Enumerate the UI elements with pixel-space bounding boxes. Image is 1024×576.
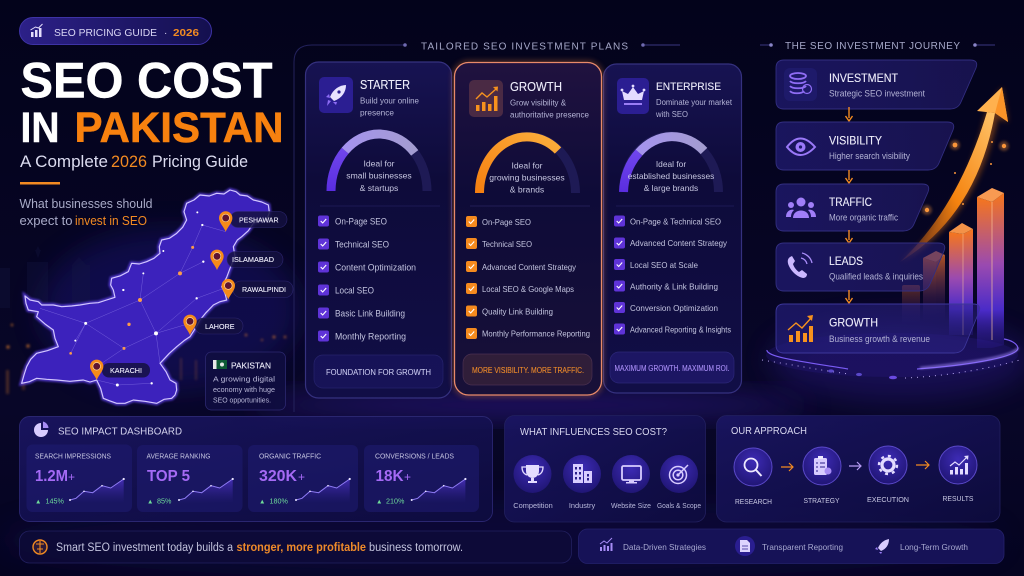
- arrow: [781, 463, 793, 471]
- metric: conversions and leads: 18K: [376, 468, 404, 485]
- feature list: Local SEO: [335, 286, 374, 296]
- step: results: [939, 446, 977, 503]
- plans section heading: [294, 42, 680, 412]
- icon: growth chart: [788, 315, 813, 342]
- growth arrow: [900, 87, 1008, 262]
- feature list: [318, 206, 440, 342]
- metric: average ranking: AVERAGE RANKING: [146, 452, 211, 460]
- gauge text: & brands: [510, 184, 544, 194]
- panel: Enterprise plan: [604, 64, 742, 393]
- step text: Strategic SEO investment: [829, 88, 926, 98]
- arrow: [846, 290, 852, 303]
- gauge text: Ideal for: [656, 159, 686, 169]
- icon: eye: [787, 138, 815, 155]
- step: research: RESEARCH: [735, 497, 772, 506]
- icon: target coin: [33, 540, 47, 554]
- benefit text: Data-Driven Strategies: [623, 542, 706, 552]
- step text: Qualified leads & inquiries: [829, 272, 924, 282]
- feature list: Advanced Content Strategy: [482, 262, 577, 272]
- intro text: expect to: [20, 213, 72, 228]
- factor: website size: Website Size: [611, 501, 651, 510]
- feature list: Authority & Link Building: [630, 282, 718, 292]
- step: execution: [867, 446, 909, 504]
- plan tagline: with SEO: [655, 109, 688, 119]
- journey step: Visibility: [776, 122, 954, 170]
- metric: organic traffic: 180%: [270, 496, 288, 506]
- title: [20, 52, 284, 152]
- plan name: GROWTH: [510, 79, 562, 94]
- gauge text: established businesses: [628, 171, 714, 181]
- step title: LEADS: [829, 254, 863, 268]
- journey section heading: THE SEO INVESTMENT JOURNEY: [785, 41, 960, 52]
- plan tagline: [360, 96, 419, 118]
- gauge text: & large brands: [644, 183, 698, 193]
- step title: VISIBILITY: [829, 134, 882, 148]
- metric: search impressions: 145%: [46, 496, 64, 506]
- icon: people: [786, 198, 816, 218]
- plan tagline: Dominate your market: [656, 97, 733, 107]
- metric: average ranking: [137, 445, 242, 512]
- feature list: Local SEO & Google Maps: [482, 284, 574, 294]
- metric: average ranking: TOP 5: [147, 468, 190, 485]
- metric: average ranking: ▲: [147, 498, 153, 506]
- gauge text: [346, 158, 412, 193]
- plan footer: MORE VISIBILITY. MORE TRAFFIC.: [472, 366, 584, 375]
- step title: GROWTH: [829, 316, 878, 330]
- feature list: Monthly Reporting: [335, 332, 406, 342]
- pin and label: Rawalpindi: RAWALPINDI: [242, 285, 286, 294]
- gauge: [331, 134, 427, 191]
- step: strategy: STRATEGY: [804, 496, 840, 505]
- panel: what influences SEO cost: [504, 416, 706, 522]
- feature list: Content Optimization: [335, 262, 416, 272]
- pin and label: Karachi: KARACHI: [110, 366, 142, 375]
- step: results: RESULTS: [942, 494, 974, 503]
- factor: competition: [513, 455, 553, 510]
- step text: Business growth & revenue: [829, 334, 930, 344]
- factor: industry: Industry: [569, 501, 595, 510]
- plan footer: [610, 352, 734, 383]
- feature list: Conversion Optimization: [630, 303, 718, 313]
- panel: Starter plan: [306, 62, 452, 398]
- plan tagline: [510, 98, 589, 120]
- journey step: Traffic: [776, 184, 929, 231]
- icon: rocket: [875, 539, 889, 554]
- intro text: invest in SEO: [75, 213, 147, 228]
- metric: conversions and leads: ▲: [376, 498, 382, 506]
- metric: conversions and leads: [364, 445, 479, 512]
- Pakistan info box: [206, 352, 286, 410]
- pin and label: Lahore: [183, 315, 243, 335]
- title: SEO COST: [20, 52, 272, 108]
- gauge: [624, 136, 718, 192]
- box text: [213, 376, 276, 404]
- plan tagline: authoritative presence: [510, 110, 589, 120]
- banner: tagline: [20, 531, 572, 563]
- gauge text: [628, 159, 714, 193]
- tagline text: stronger, more profitable: [236, 542, 366, 554]
- bar 1: [923, 251, 945, 322]
- feature list: On-Page SEO: [335, 216, 387, 226]
- factor: website size: [611, 455, 651, 510]
- factor: goals and scope: Goals & Scope: [657, 501, 701, 510]
- metric: organic traffic: 320K: [259, 468, 297, 485]
- step: strategy: [803, 447, 841, 505]
- feature list: Advanced Reporting & Insights: [630, 324, 731, 334]
- benefit text: Long-Term Growth: [900, 542, 968, 552]
- journey step: Leads: [776, 243, 945, 291]
- metric: search impressions: ▲: [35, 498, 41, 506]
- gauge text: & startups: [360, 183, 398, 193]
- step title: TRAFFIC: [829, 195, 872, 209]
- feature list: On-Page SEO: [482, 217, 531, 227]
- panel title: WHAT INFLUENCES SEO COST?: [520, 426, 667, 438]
- icon: data chart: [600, 538, 612, 551]
- arrow: [846, 107, 852, 121]
- icon: phone: [788, 253, 812, 278]
- arrow: [916, 461, 929, 469]
- plan name: STARTER: [360, 77, 410, 92]
- icon: bar chart badge: [30, 24, 42, 37]
- step title: INVESTMENT: [829, 71, 899, 85]
- network lines: [40, 225, 228, 385]
- step text: More organic traffic: [829, 212, 899, 222]
- gauge text: [489, 160, 565, 194]
- icon: Pakistan flag: [213, 360, 227, 369]
- intro text: What businesses should: [20, 196, 152, 211]
- panel: Growth plan: [454, 62, 602, 395]
- feature list: Monthly Performance Reporting: [482, 328, 590, 338]
- bar 3: [977, 188, 1004, 348]
- benefit text: Transparent Reporting: [762, 542, 843, 552]
- metric: organic traffic: +: [298, 470, 305, 484]
- tagline text: business tomorrow.: [369, 542, 463, 554]
- title: PAKISTAN: [74, 104, 284, 152]
- feature list: Technical SEO: [482, 239, 532, 249]
- pin and label: Peshawar: PESHAWAR: [239, 216, 279, 224]
- pin and label: Karachi: [90, 360, 150, 380]
- metric: average ranking: 85%: [157, 496, 172, 506]
- network nodes: [69, 211, 204, 386]
- box text: SEO opportunities.: [213, 398, 271, 404]
- map of Pakistan: [22, 190, 293, 403]
- plan footer: MAXIMUM GROWTH. MAXIMUM ROI.: [614, 364, 730, 373]
- feature list: [614, 206, 734, 334]
- plans section heading: TAILORED SEO INVESTMENT PLANS: [421, 42, 628, 52]
- icon: report: [735, 536, 755, 556]
- arrow: [846, 170, 852, 183]
- gauge text: Ideal for: [511, 160, 543, 170]
- icon: pie chart: [34, 422, 48, 437]
- pin and label: Lahore: LAHORE: [205, 322, 234, 331]
- dashboard title: SEO IMPACT DASHBOARD: [58, 426, 182, 438]
- city skyline backdrop: [0, 246, 90, 308]
- metric: organic traffic: ORGANIC TRAFFIC: [259, 452, 321, 460]
- subtitle: 2026: [111, 153, 147, 171]
- plan footer: FOUNDATION FOR GROWTH: [326, 368, 431, 377]
- pin and label: Peshawar: [219, 211, 287, 232]
- badge year: 2026: [173, 27, 199, 39]
- metric: organic traffic: [248, 445, 358, 512]
- panel: our approach: [716, 416, 1000, 522]
- plan footer: [463, 354, 592, 385]
- tagline text: [56, 542, 463, 554]
- icon: rocket: [319, 77, 353, 113]
- pin and label: Islamabad: [210, 250, 283, 270]
- title: IN: [20, 104, 60, 152]
- plan tagline: Build your online: [360, 96, 419, 106]
- icon: growth chart: [469, 80, 503, 117]
- metric: search impressions: SEARCH IMPRESSIONS: [35, 452, 111, 460]
- city lights: [6, 324, 286, 394]
- feature list: Quality Link Building: [482, 306, 553, 316]
- factor: goals and scope: [657, 455, 701, 510]
- plan tagline: Grow visibility &: [510, 98, 566, 108]
- metric: search impressions: 1.2M: [35, 468, 68, 485]
- subtitle: [20, 153, 248, 171]
- metric: search impressions: +: [68, 470, 75, 484]
- bar 2: [949, 223, 973, 335]
- gauge text: small businesses: [346, 171, 412, 181]
- box title: PAKISTAN: [231, 360, 271, 370]
- pin and label: Rawalpindi: [222, 279, 293, 299]
- metric: conversions and leads: CONVERSIONS / LEADS: [375, 452, 454, 460]
- journey step: Investment: [776, 60, 977, 109]
- step text: Higher search visibility: [829, 151, 911, 161]
- feature list: On-Page & Technical SEO: [630, 216, 721, 226]
- icon: crown: [617, 78, 649, 114]
- step: research: [734, 448, 772, 506]
- feature list: Advanced Content Strategy: [630, 238, 728, 248]
- faint bar: [902, 285, 920, 325]
- arrow: [849, 462, 861, 470]
- growth platform: [762, 333, 1020, 379]
- gauge text: growing businesses: [489, 172, 565, 182]
- subtitle: A Complete: [20, 153, 108, 171]
- banner: benefits: [578, 529, 1004, 564]
- metric: search impressions: [26, 444, 132, 512]
- feature list: Local SEO at Scale: [630, 260, 698, 270]
- sparks: [922, 140, 1009, 215]
- factor: industry: [563, 455, 601, 510]
- metric: organic traffic: ▲: [259, 498, 265, 506]
- gauge text: Ideal for: [363, 158, 395, 168]
- gauge: [479, 136, 576, 193]
- panel title: OUR APPROACH: [731, 425, 807, 437]
- subtitle: Pricing Guide: [152, 153, 248, 171]
- top badge: [20, 18, 212, 44]
- metric: conversions and leads: 210%: [386, 496, 405, 506]
- plan tagline: [655, 97, 733, 119]
- rising bars: [902, 188, 1004, 348]
- box text: A growing digital: [213, 376, 276, 384]
- box text: economy with huge: [213, 387, 275, 394]
- feature list: Technical SEO: [335, 240, 389, 250]
- factor: competition: Competition: [513, 501, 553, 510]
- tagline text: Smart SEO investment today builds a: [56, 542, 234, 554]
- arrow: [846, 230, 852, 243]
- feature list: [466, 206, 590, 339]
- plan footer: [314, 355, 443, 388]
- pin and label: Islamabad: ISLAMABAD: [232, 255, 274, 264]
- step: execution: EXECUTION: [867, 495, 909, 504]
- plan tagline: presence: [360, 108, 394, 118]
- accent rule: [20, 182, 60, 184]
- metric: conversions and leads: +: [404, 470, 411, 484]
- panel: SEO impact dashboard: [20, 416, 492, 522]
- icon: coins: [784, 68, 817, 101]
- plan name: ENTERPRISE: [656, 81, 721, 93]
- badge label: SEO PRICING GUIDE: [54, 27, 157, 39]
- feature list: Basic Link Building: [335, 308, 405, 318]
- badge separator: ·: [164, 28, 167, 39]
- intro text: [20, 196, 152, 228]
- journey step: Growth: [776, 304, 980, 353]
